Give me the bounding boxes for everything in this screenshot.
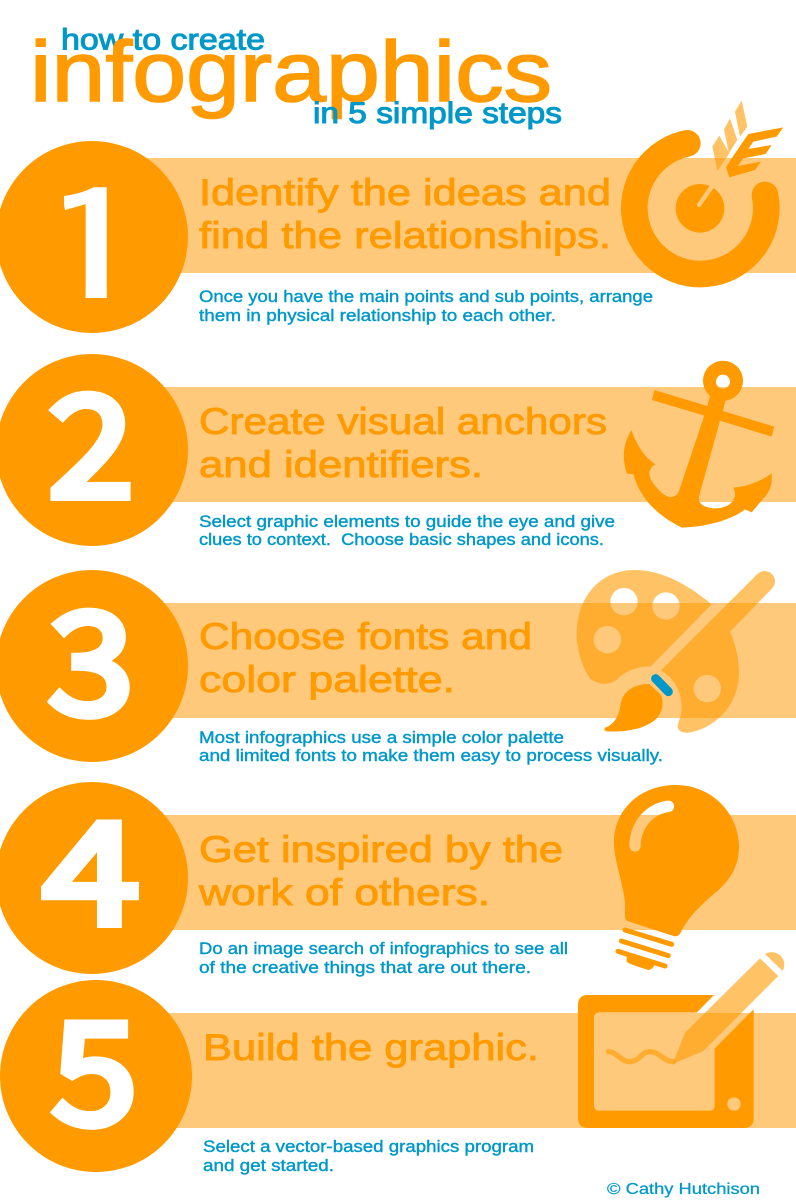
body text	[199, 729, 663, 765]
body text: and get started.	[203, 1157, 334, 1175]
icon: anchor	[624, 361, 774, 528]
number circle	[0, 782, 188, 974]
heading: Create visual anchors	[199, 400, 607, 442]
heading	[199, 615, 532, 700]
credit: © Cathy Hutchison	[607, 1181, 760, 1198]
band	[90, 603, 796, 718]
panel: step 4	[0, 760, 796, 977]
panel: step 3	[0, 550, 796, 765]
icon: drawing tablet and pencil	[578, 952, 784, 1128]
numeral 2: 2	[48, 333, 134, 538]
numeral 4: 4	[42, 760, 140, 965]
body text: clues to context. Choose basic shapes and icons.	[199, 531, 604, 549]
body text: them in physical relationship to each other.	[199, 307, 556, 325]
body text	[203, 1138, 534, 1175]
body text: Do an image search of infographics to see all	[199, 940, 568, 958]
heading: and identifiers.	[199, 443, 483, 485]
heading	[199, 400, 607, 485]
panel: step 2	[0, 333, 796, 549]
numeral 3: 3	[48, 550, 134, 755]
number circle	[0, 570, 188, 762]
heading: Identify the ideas and	[199, 171, 611, 213]
body text: Once you have the main points and sub points, arrange	[199, 288, 653, 306]
icon: palette and brush	[577, 570, 775, 733]
heading: Get inspired by the	[199, 828, 563, 870]
title line: in 5 simple steps: in 5 simple steps	[313, 97, 562, 130]
title block	[30, 24, 562, 130]
number circle	[0, 141, 188, 333]
body text	[199, 288, 653, 325]
body text: Most infographics use a simple color palette	[199, 729, 564, 747]
heading: work of others.	[198, 871, 490, 913]
heading	[199, 171, 611, 256]
band	[90, 387, 796, 502]
body text: Select a vector-based graphics program	[203, 1138, 534, 1156]
body text	[199, 940, 568, 977]
body text	[199, 513, 615, 549]
band	[90, 815, 796, 930]
band	[90, 1013, 796, 1128]
icon: light bulb	[614, 785, 739, 970]
panel: step 1	[0, 101, 796, 341]
heading: color palette.	[199, 658, 455, 700]
title main word: infographics: infographics	[30, 25, 552, 120]
body text: of the creative things that are out there.	[199, 959, 531, 977]
panel: step 5	[0, 952, 796, 1175]
heading: Build the graphic.	[203, 1026, 539, 1068]
heading	[198, 828, 563, 913]
numeral 1: 1	[51, 128, 141, 341]
band	[90, 158, 796, 273]
body text: and limited fonts to make them easy to process visually.	[199, 747, 663, 765]
title line: how to create: how to create	[61, 24, 265, 56]
numeral 5: 5	[52, 960, 138, 1165]
number circle	[0, 354, 188, 546]
body text: Select graphic elements to guide the eye and give	[199, 513, 615, 531]
heading: Choose fonts and	[199, 615, 532, 657]
number circle	[0, 980, 192, 1172]
icon: target with arrow	[634, 101, 783, 274]
heading: find the relationships.	[199, 214, 611, 256]
